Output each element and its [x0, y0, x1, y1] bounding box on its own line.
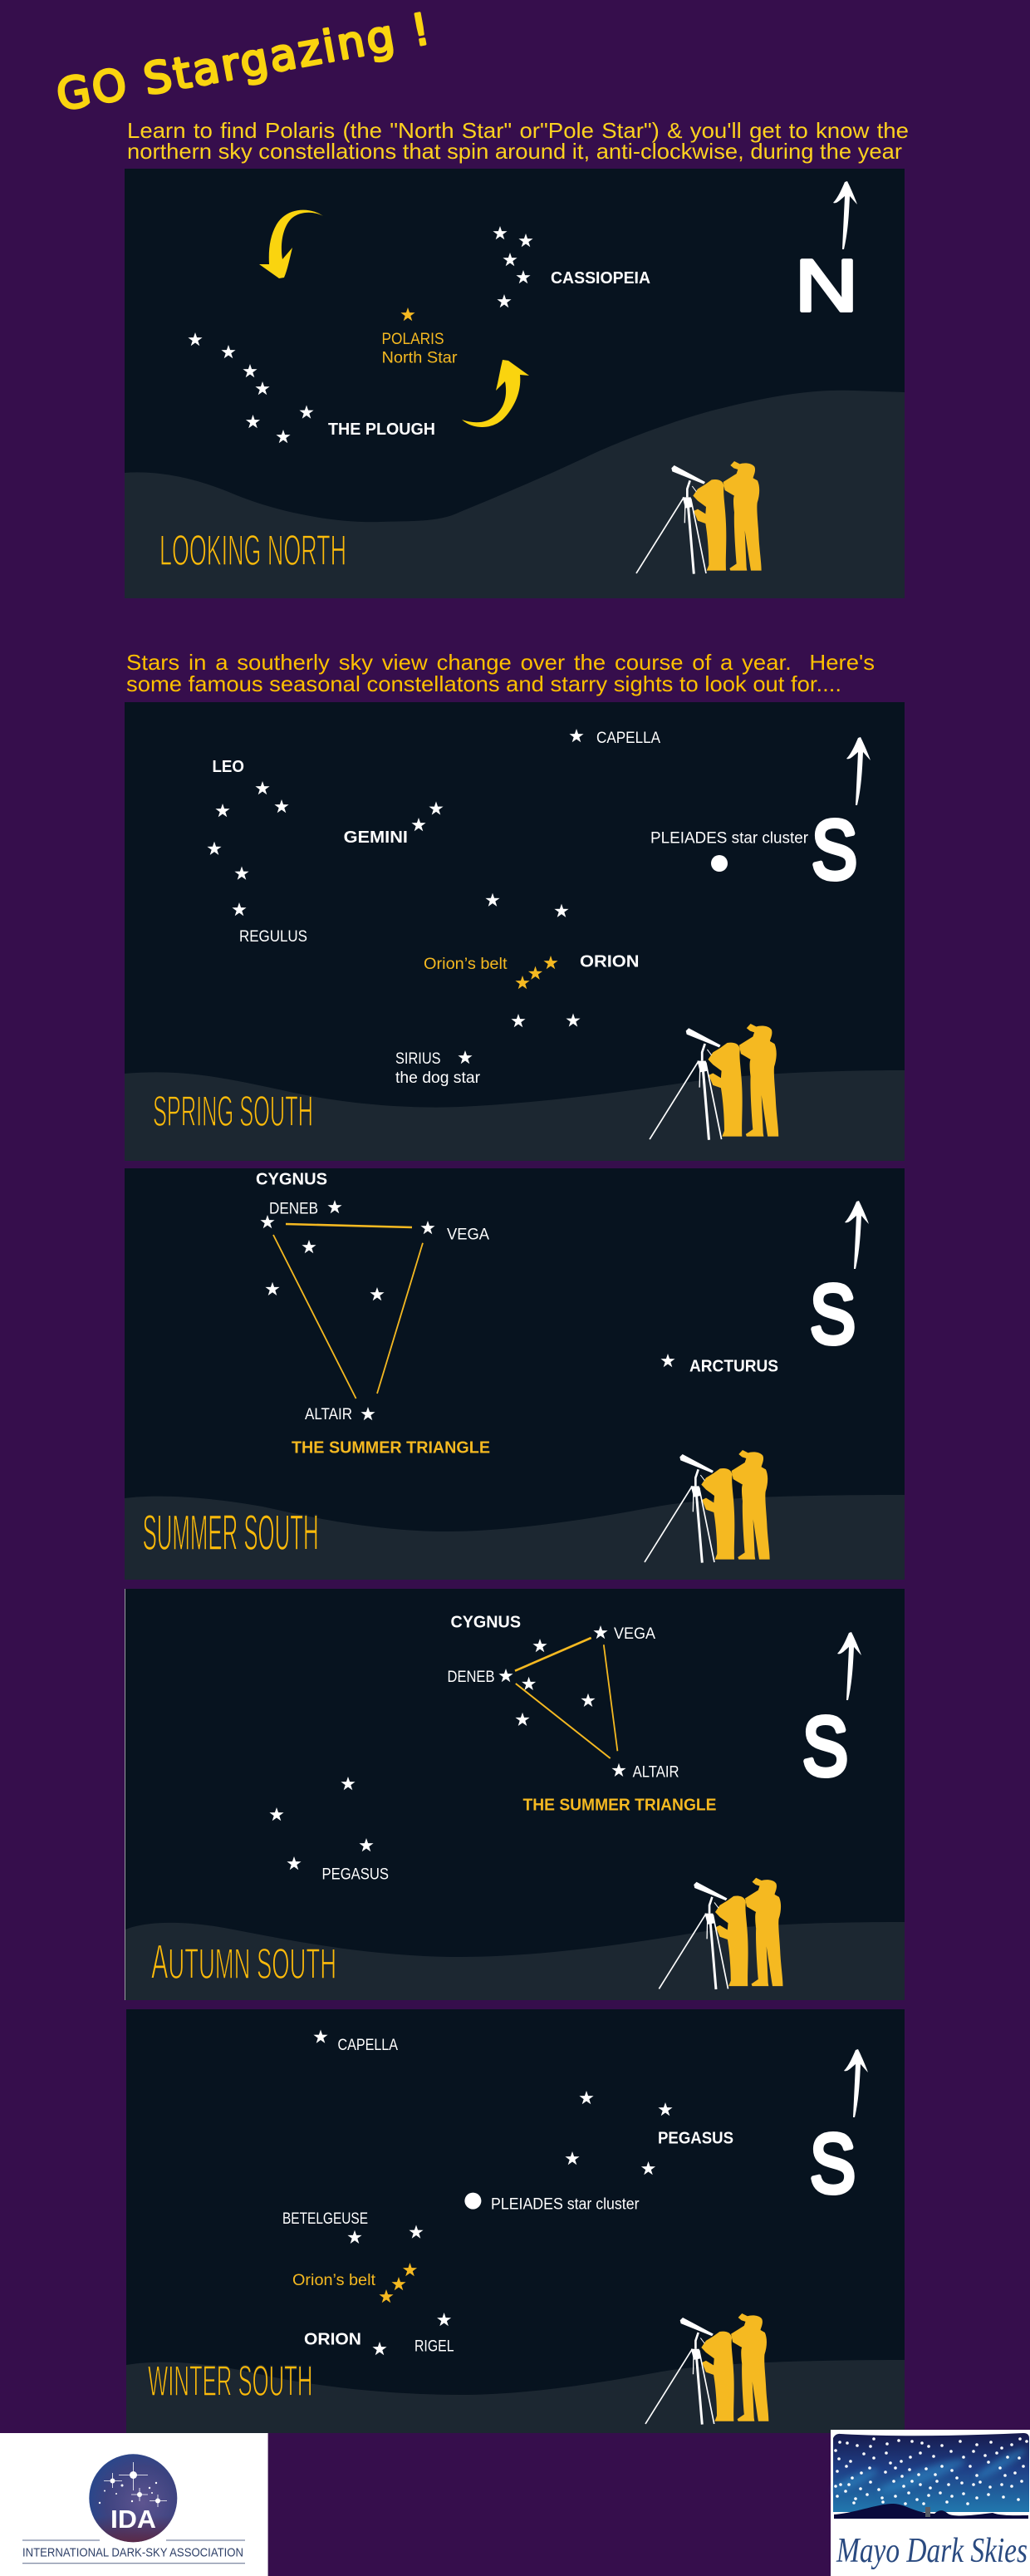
logo rules	[22, 2540, 245, 2564]
logo letters: IDA	[110, 2505, 156, 2534]
summer triangle lines	[273, 1224, 423, 1399]
ground hill	[125, 1495, 905, 1580]
stars: Gemini	[411, 801, 444, 831]
label: Pegasus: PEGASUS	[658, 2129, 733, 2147]
logo caption: INTERNATIONAL DARK-SKY ASSOCIATION	[22, 2546, 243, 2560]
arrow: anti-clockwise bottom	[462, 360, 529, 427]
letter: N: N	[795, 244, 858, 327]
logo sparkles	[99, 2471, 160, 2504]
hills	[834, 2504, 1028, 2519]
label: Pegasus: PEGASUS	[322, 1866, 389, 1884]
Pleiades cluster dot	[464, 2193, 481, 2210]
stars: Cassiopeia	[493, 226, 533, 307]
panel: autumn south	[125, 1589, 905, 2000]
stars: Leo	[207, 781, 289, 916]
star: Capella	[569, 729, 584, 742]
label: Orion's belt: Orion’s belt	[292, 2272, 376, 2289]
stargazers	[636, 461, 762, 574]
label: Altair: ALTAIR	[305, 1406, 352, 1423]
label: Gemini: GEMINI	[344, 828, 408, 847]
stargazers	[650, 1024, 778, 1140]
letter: S: S	[810, 1268, 856, 1361]
label: Sirius: SIRIUS	[395, 1050, 441, 1068]
stars: Orion's belt	[379, 2263, 417, 2303]
stars: Orion's belt	[515, 956, 558, 989]
letter: S: S	[812, 804, 857, 897]
sky stars	[836, 2439, 1027, 2504]
summer triangle lines	[515, 1638, 617, 1758]
lighthouse	[925, 2507, 930, 2517]
panel: spring south	[125, 702, 905, 1161]
label: Leo: LEO	[213, 758, 244, 776]
label: Capella: CAPELLA	[596, 730, 660, 747]
label: Orion's belt: Orion’s belt	[424, 956, 508, 973]
arrow: south	[844, 2049, 868, 2117]
star: Polaris	[400, 307, 415, 321]
stars: The Plough	[188, 332, 314, 443]
ground hill	[125, 1922, 905, 2000]
label: Polaris North Star	[382, 331, 458, 367]
arrow: south	[845, 1201, 869, 1269]
stars: Pegasus	[565, 2091, 673, 2175]
panel: summer south	[125, 1168, 905, 1580]
panel: looking north	[125, 169, 905, 598]
intro text: south: Stars in a southerly sky view change over the course of a year. Here's	[126, 650, 875, 675]
logo disc	[89, 2454, 177, 2542]
arrow: north	[833, 181, 857, 249]
label: Cassiopeia: CASSIOPEIA	[551, 269, 650, 288]
panel: summer south: SUMMER SOUTH	[143, 1505, 319, 1561]
label: Sirius	[395, 1050, 481, 1087]
label: Deneb: DENEB	[269, 1201, 318, 1218]
star: Capella	[313, 2029, 328, 2043]
stars: Cygnus and triangle	[498, 1625, 626, 1777]
star: Arcturus	[660, 1354, 675, 1367]
label: Pleiades: PLEIADES star cluster	[650, 829, 809, 848]
label: Rigel: RIGEL	[414, 2338, 454, 2355]
intro text: south	[126, 650, 875, 696]
label: The Plough: THE PLOUGH	[328, 420, 435, 439]
intro text: north: Learn to find Polaris (the "North Star" or"Pole Star") & you'll get to know the	[127, 118, 909, 143]
ground hill	[125, 1070, 905, 1161]
label: Altair: ALTAIR	[633, 1764, 679, 1782]
star: Sirius	[458, 1050, 473, 1064]
arrow: south	[837, 1632, 861, 1700]
label: Orion: ORION	[580, 953, 640, 971]
label: Vega: VEGA	[447, 1227, 489, 1244]
label: The Summer Triangle: THE SUMMER TRIANGLE	[292, 1439, 490, 1458]
Pleiades cluster dot	[711, 855, 728, 872]
stargazers	[645, 1450, 770, 1563]
stars: Orion	[485, 893, 581, 1027]
arrow: anti-clockwise top	[259, 210, 323, 278]
letter: S: S	[810, 2117, 856, 2210]
panel name: AUTUMN SOUTH	[151, 1935, 336, 1989]
stargazers	[659, 1878, 782, 1989]
label: Deneb: DENEB	[447, 1669, 495, 1686]
panel: winter south	[126, 2009, 905, 2433]
logo: Mayo Dark Skies	[831, 2430, 1030, 2576]
label: Orion: ORION	[304, 2330, 361, 2348]
logo sparkle rays	[104, 2462, 167, 2507]
label: The Summer Triangle: THE SUMMER TRIANGLE	[523, 1797, 716, 1815]
label: Arcturus: ARCTURUS	[689, 1358, 778, 1376]
panel: spring south: SPRING SOUTH	[153, 1088, 313, 1136]
logo: International Dark-Sky Association	[0, 2433, 268, 2576]
milky way glow	[831, 2445, 1028, 2498]
stargazers	[645, 2313, 768, 2425]
intro text: south: some famous seasonal constellatons and starry sights to look out for....	[126, 671, 841, 696]
ground hill	[125, 391, 905, 598]
arrow: south	[846, 737, 871, 805]
label: Vega: VEGA	[614, 1625, 655, 1643]
label: Cygnus: CYGNUS	[450, 1614, 521, 1632]
label: Cygnus: CYGNUS	[256, 1171, 327, 1189]
intro text: north: northern sky constellations that spin around it, anti-clockwise, during the year	[127, 139, 902, 164]
stars: Orion	[347, 2225, 451, 2355]
label: Polaris North Star: North Star	[382, 349, 458, 367]
ground hill	[126, 2360, 905, 2433]
label: Regulus: REGULUS	[239, 928, 307, 946]
stars: Pegasus	[269, 1777, 374, 1870]
panel name: LOOKING NORTH	[159, 527, 346, 575]
intro text: north	[127, 118, 909, 164]
night sky	[833, 2433, 1029, 2512]
label: Polaris North Star: POLARIS	[382, 331, 444, 348]
label: Betelgeuse: BETELGEUSE	[282, 2210, 368, 2228]
label: Pleiades: PLEIADES star cluster	[491, 2196, 640, 2214]
title: GO Stargazing !	[53, 4, 434, 121]
stars: Cygnus and triangle	[260, 1200, 435, 1420]
label: Capella: CAPELLA	[337, 2037, 398, 2054]
panel: winter south: WINTER SOUTH	[148, 2357, 312, 2406]
letter: S: S	[802, 1700, 848, 1793]
label: Sirius: the dog star	[395, 1069, 481, 1087]
